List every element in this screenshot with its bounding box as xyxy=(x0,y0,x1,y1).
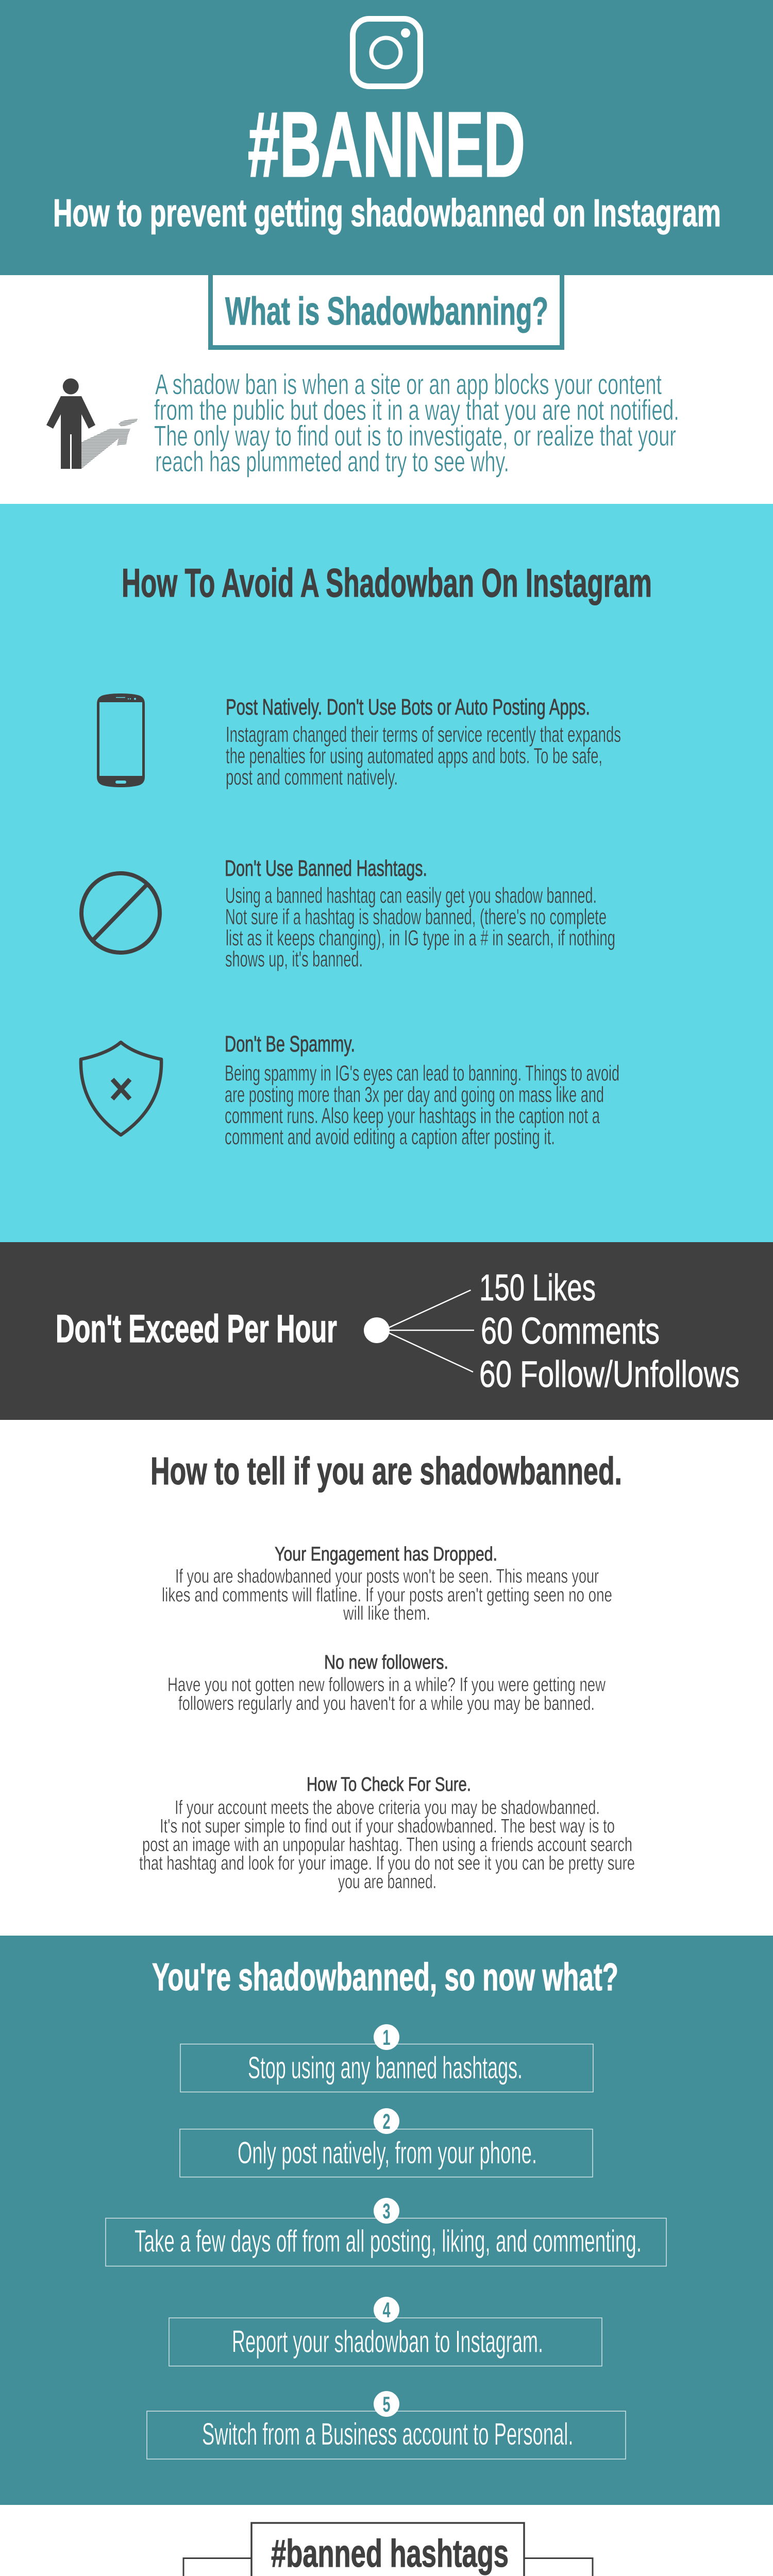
diagram: branching lines xyxy=(364,1290,474,1372)
tip: post natively xyxy=(226,694,621,790)
sign: no new followers: Have you not gotten new followers in a while? If you were getting new xyxy=(167,1674,606,1696)
sign: how to check: If your account meets the above criteria you may be shadowbanned. xyxy=(175,1797,600,1819)
sign: how to check: How To Check For Sure. xyxy=(307,1774,471,1795)
tip: banned hashtags xyxy=(225,856,615,972)
tip: don't be spammy xyxy=(225,1031,619,1149)
icon: person with shadow xyxy=(46,378,138,469)
step 2: Only post natively, from your phone. xyxy=(238,2136,537,2170)
step 1: Stop using any banned hashtags. xyxy=(248,2050,523,2085)
tip: don't be spammy: Don't Be Spammy. xyxy=(225,1031,355,1057)
heading box: banned hashtags xyxy=(251,2523,524,2576)
step 5 xyxy=(147,2391,626,2459)
icon: cell phone xyxy=(97,693,145,787)
sign: engagement dropped: Your Engagement has Dropped. xyxy=(275,1544,497,1565)
step 5: 5 xyxy=(382,2392,391,2416)
text block: definition: reach has plummeted and try to see why. xyxy=(155,445,509,478)
step 4: Report your shadowban to Instagram. xyxy=(232,2325,543,2359)
sign: no new followers xyxy=(167,1652,606,1715)
step 2: 2 xyxy=(382,2109,391,2133)
step 1 xyxy=(180,2024,593,2092)
step 4: 4 xyxy=(382,2298,391,2322)
panel: hourly limits xyxy=(0,1242,773,1420)
text block: definition xyxy=(154,368,679,478)
step 1: 1 xyxy=(382,2025,391,2049)
icon: ban xyxy=(81,873,160,953)
step 2 xyxy=(180,2108,593,2177)
tip: post natively: Post Natively. Don't Use Bots or Auto Posting Apps. xyxy=(226,694,590,720)
title: #BANNED xyxy=(248,93,525,196)
panel: how to tell xyxy=(0,1420,773,1936)
tip: banned hashtags: Don't Use Banned Hashtags. xyxy=(225,856,427,881)
heading box: banned hashtags: #banned hashtags xyxy=(271,2532,509,2575)
sign: engagement dropped xyxy=(162,1544,612,1624)
heading box: what is shadowbanning: What is Shadowbanning? xyxy=(225,290,548,333)
sign: no new followers: No new followers. xyxy=(324,1652,448,1673)
panel: banned hashtags xyxy=(0,2505,773,2576)
sign: no new followers: followers regularly and you haven't for a while you may be banned. xyxy=(178,1693,595,1715)
panel: how to avoid a shadowban xyxy=(0,504,773,1242)
sign: engagement dropped: likes and comments will flatline. If your posts aren't getting seen no one xyxy=(162,1584,612,1606)
heading box: what is shadowbanning xyxy=(210,275,562,347)
step 3: 3 xyxy=(382,2199,391,2223)
step 4 xyxy=(169,2297,602,2366)
tip: banned hashtags: shows up, it's banned. xyxy=(225,947,363,972)
limit: likes: 150 Likes xyxy=(479,1267,596,1309)
tree connectors xyxy=(183,2558,593,2576)
sign: engagement dropped: will like them. xyxy=(343,1603,430,1624)
sign: how to check xyxy=(139,1774,635,1893)
sign: how to check: It's not super simple to find out if your shadowbanned. The best way is to xyxy=(160,1816,615,1837)
heading: don't exceed per hour: Don't Exceed Per Hour xyxy=(56,1307,337,1351)
tip: don't be spammy: comment and avoid editing a caption after posting it. xyxy=(225,1125,555,1149)
tip: post natively: post and comment natively. xyxy=(226,765,398,790)
icon: instagram xyxy=(352,19,421,87)
icon: shield xyxy=(81,1042,161,1135)
limit: comments: 60 Comments xyxy=(481,1311,660,1352)
panel: page header xyxy=(0,0,773,275)
sign: engagement dropped: If you are shadowbanned your posts won't be seen. This means your xyxy=(175,1566,599,1587)
step 3 xyxy=(106,2198,666,2266)
panel: so now what xyxy=(0,1936,773,2505)
panel: what is shadowbanning xyxy=(0,275,773,504)
sign: how to check: you are banned. xyxy=(338,1871,436,1893)
